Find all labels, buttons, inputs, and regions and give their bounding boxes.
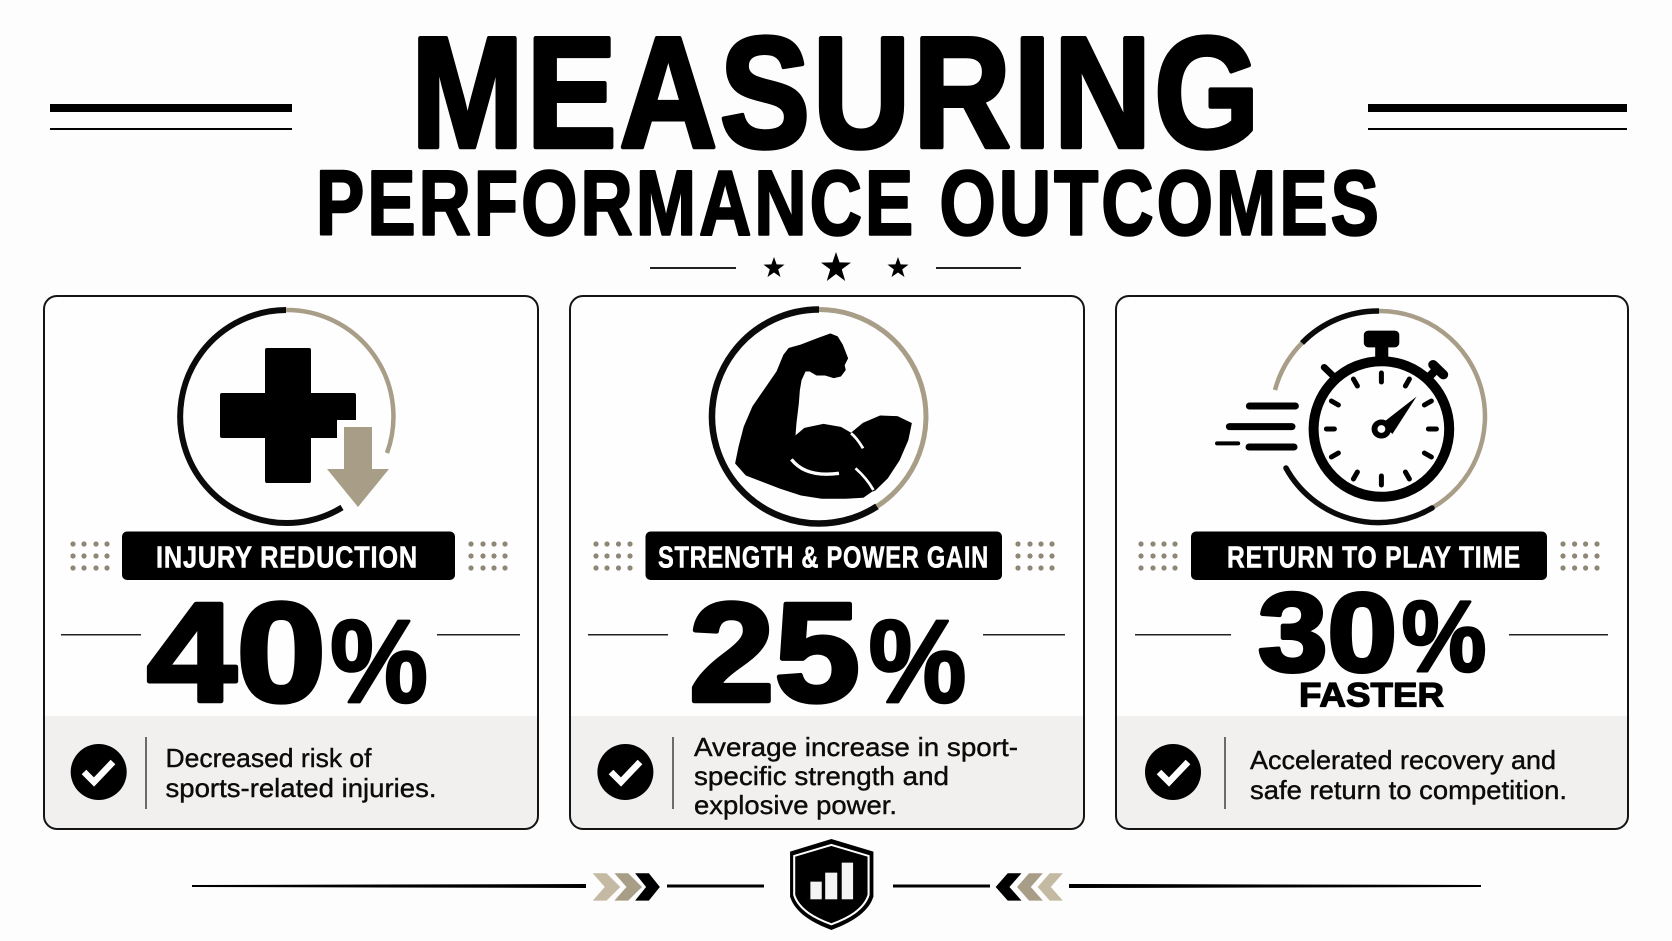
- footer rule right: [893, 884, 1481, 888]
- stat: 30% faster: %: [1402, 581, 1486, 693]
- label: strength and power gain: STRENGTH & POWER GAIN: [658, 540, 989, 574]
- title: PERFORMANCE OUTCOMES: [316, 152, 1382, 254]
- label: injury reduction: INJURY REDUCTION: [156, 540, 418, 574]
- panel: injury reduction: [44, 296, 538, 829]
- icon: shield with bar chart: [790, 839, 873, 930]
- stat: 40%: %: [330, 596, 428, 728]
- header rule left: [50, 104, 292, 130]
- description: [1250, 745, 1567, 805]
- dots right: [1560, 541, 1600, 571]
- panel: return to play time: [1116, 296, 1628, 829]
- arrow: chevrons pointing right: [593, 873, 660, 901]
- description: specific strength and: [694, 761, 949, 791]
- description: Decreased risk of: [166, 743, 372, 773]
- arrow: chevrons pointing left: [996, 873, 1063, 901]
- description: [166, 743, 436, 803]
- icon: stopwatch: [1217, 311, 1485, 523]
- title: [316, 5, 1382, 254]
- stat: 25%: %: [868, 596, 966, 728]
- star divider: [650, 252, 1021, 281]
- label: return to play time: RETURN TO PLAY TIME: [1227, 540, 1521, 574]
- description: Accelerated recovery and: [1250, 745, 1556, 775]
- dots right: [1015, 541, 1055, 571]
- dots left: [70, 541, 110, 571]
- description: Average increase in sport-: [694, 732, 1018, 762]
- icon: flexed arm: [712, 310, 926, 524]
- label: strength and power gain: [646, 532, 1002, 580]
- stat: 25%: 25: [689, 573, 860, 731]
- stat: 30% faster: FASTER: [1299, 676, 1444, 714]
- header rule right: [1368, 104, 1627, 130]
- description: explosive power.: [694, 790, 897, 820]
- dots right: [468, 541, 508, 571]
- stat: 40%: 40: [147, 573, 326, 731]
- icon: check: [597, 744, 653, 800]
- icon: medical cross with down arrow: [180, 310, 397, 523]
- description: sports-related injuries.: [166, 773, 436, 803]
- stat: 30% faster: [1135, 571, 1608, 714]
- label: injury reduction: [122, 532, 455, 580]
- stat: 30% faster: 30: [1258, 571, 1397, 695]
- panel: strength and power gain: [570, 296, 1084, 829]
- title: MEASURING: [411, 5, 1262, 181]
- icon: check: [1145, 744, 1201, 800]
- description: safe return to competition.: [1250, 775, 1567, 805]
- label: return to play time: [1191, 532, 1547, 580]
- stat: 25%: [588, 573, 1065, 731]
- dots left: [1138, 541, 1178, 571]
- dots left: [593, 541, 633, 571]
- stat: 40%: [61, 573, 520, 731]
- icon: check: [71, 744, 127, 800]
- description: [694, 732, 1018, 820]
- footer rule left: [192, 884, 764, 888]
